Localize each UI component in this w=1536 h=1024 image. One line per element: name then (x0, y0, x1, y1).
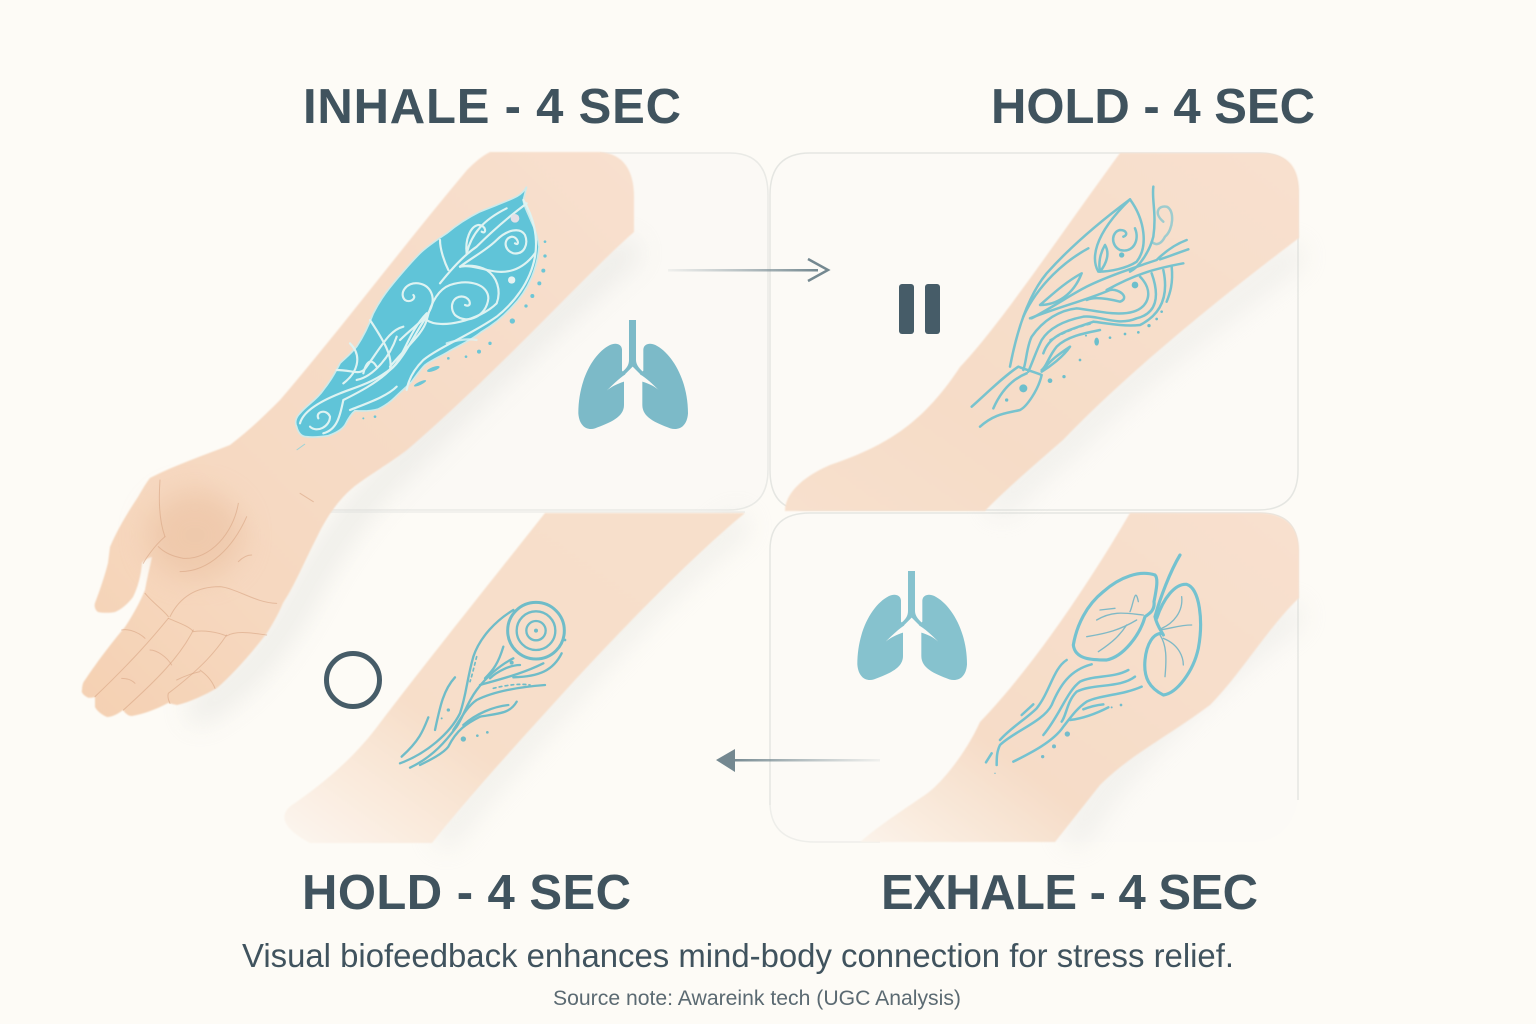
forearm shape (860, 513, 1299, 842)
palm and finger details (95, 480, 313, 710)
arm shadow (1070, 610, 1299, 842)
heading: exhale: EXHALE - 4 SEC (881, 866, 1258, 920)
palm shading (147, 491, 243, 579)
heading: inhale: INHALE - 4 SEC (303, 80, 681, 134)
icon: lungs inhale (578, 320, 688, 429)
panel: main arm with hand (82, 152, 634, 717)
ink fill (296, 187, 539, 437)
panel: bottom-left forearm (284, 513, 745, 843)
icon: pause (899, 284, 940, 334)
tattoo: lungs and waves (986, 555, 1201, 765)
forearm shape (785, 153, 1299, 511)
arm shadow (440, 520, 745, 843)
ink swirl lines (300, 200, 536, 433)
heading: hold bottom: HOLD - 4 SEC (302, 866, 631, 920)
caption: Visual biofeedback enhances mind-body connection for stress relief. (242, 937, 1234, 974)
ink dots (362, 214, 547, 419)
tattoo: feather swirl (400, 602, 564, 768)
arrow: exhale to hold (716, 749, 880, 772)
source note: Source note: Awareink tech (UGC Analysis) (553, 987, 961, 1010)
arm shadow (995, 250, 1299, 511)
ink tail (297, 444, 305, 450)
arrow: inhale to hold (668, 259, 828, 281)
tattoo dots (994, 704, 1122, 774)
icon: circle (326, 654, 380, 706)
tattoo dots (441, 629, 566, 742)
tattoo: flowing lines (972, 187, 1188, 427)
panel: step card frames (330, 153, 1298, 842)
heading: hold top: HOLD - 4 SEC (991, 80, 1315, 134)
forearm shape (284, 513, 745, 843)
panel: bottom-right forearm (860, 513, 1299, 842)
tattoo: filled ink (296, 187, 547, 450)
arm and hand (82, 152, 634, 717)
panel: top-right forearm (785, 153, 1299, 511)
arm shadow (190, 245, 634, 715)
tattoo dots (1005, 252, 1163, 402)
icon: lungs exhale (857, 571, 967, 680)
